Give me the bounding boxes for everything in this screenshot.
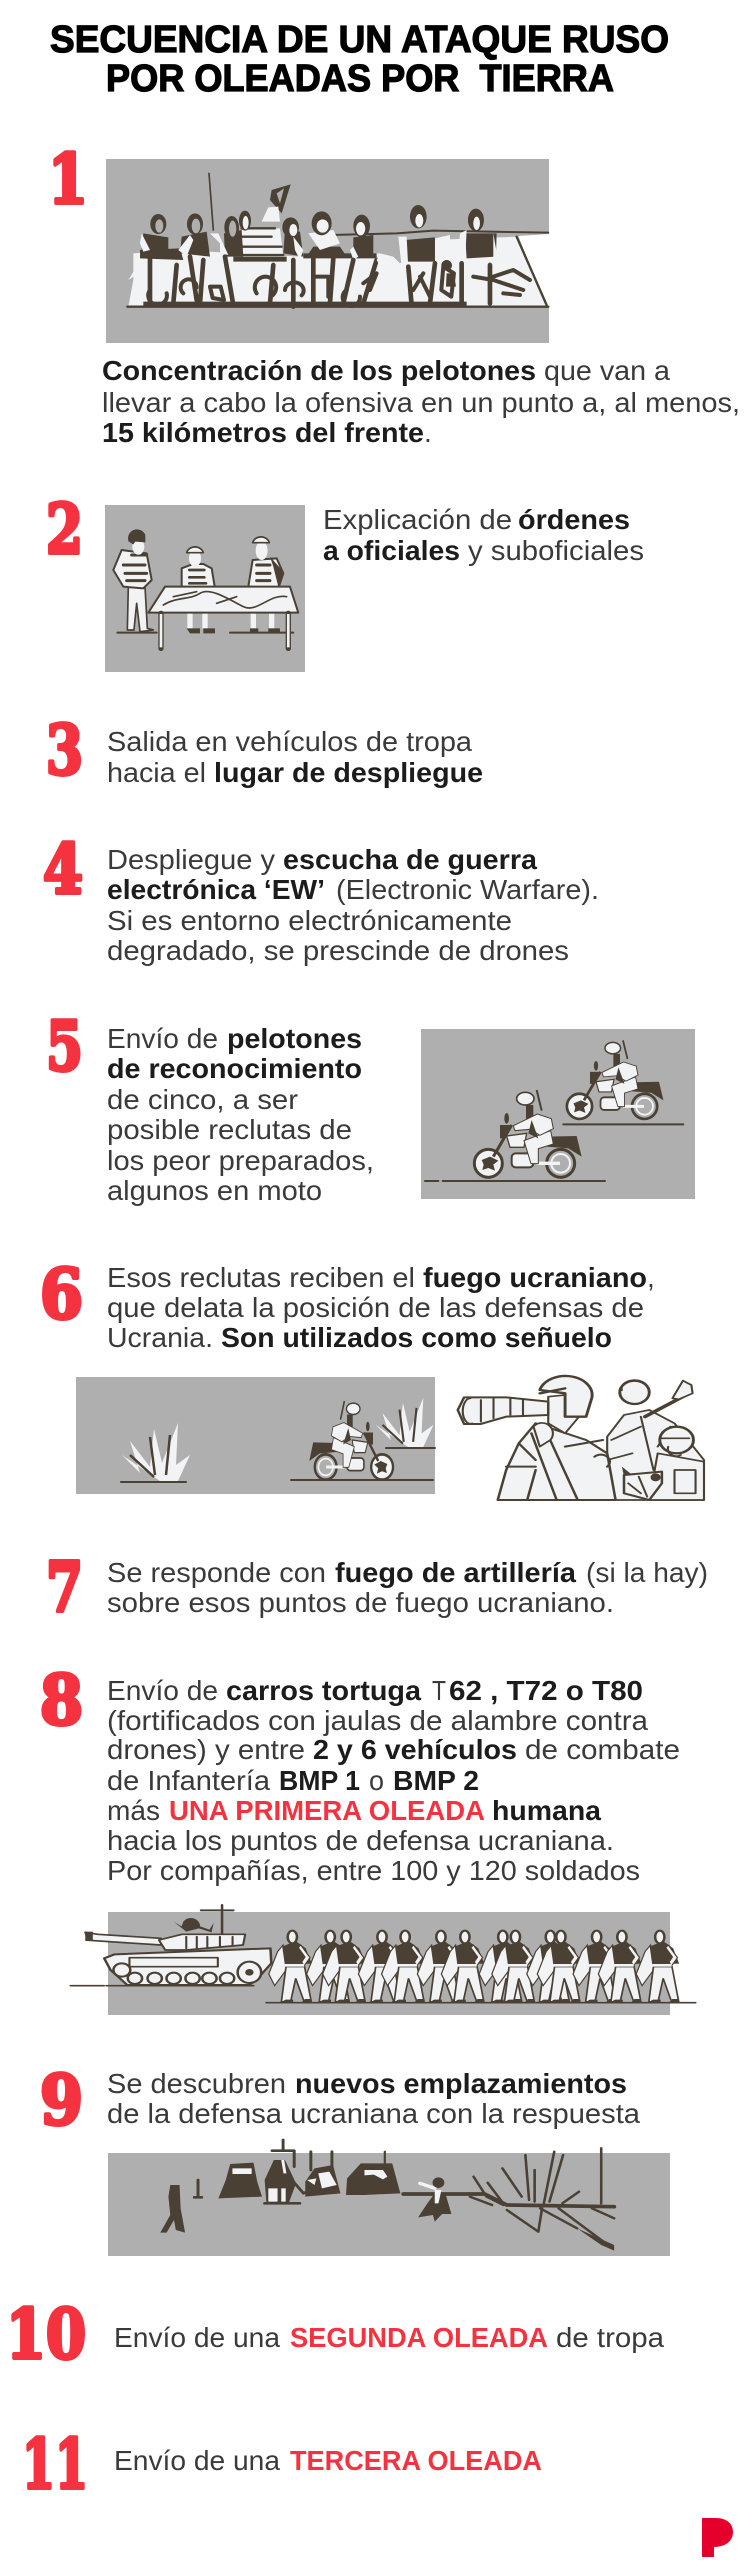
illustration: vehicles and troops among explosions [108, 2140, 670, 2256]
description: escucha de guerra [283, 844, 537, 875]
title [50, 19, 669, 100]
illustration: troops gathered around a tank [106, 159, 549, 343]
description: , [647, 1262, 655, 1293]
description: Ucrania. [107, 1322, 213, 1353]
number 10: 10 [6, 2295, 86, 2375]
description: fuego de artillería [335, 1557, 576, 1588]
description: (Electronic Warfare). [336, 874, 599, 905]
description [107, 1262, 655, 1353]
description: hacia los puntos de defensa ucraniana. [107, 1825, 614, 1856]
description: BMP 1 [279, 1765, 360, 1796]
description: Esos reclutas reciben el [107, 1262, 415, 1293]
description: Se descubren [107, 2068, 286, 2099]
number 4: 4 [43, 830, 83, 910]
description: Son utilizados como señuelo [221, 1322, 612, 1353]
title: POR OLEADAS POR TIERRA [106, 58, 614, 100]
description: fuego ucraniano [423, 1262, 647, 1293]
description: que delata la posición de las defensas de [107, 1292, 644, 1323]
description: Se responde con [107, 1557, 326, 1588]
description: Explicación de [323, 504, 512, 535]
description [323, 504, 644, 566]
number 11: 11 [22, 2425, 88, 2505]
description: (fortificados con jaulas de alambre contra [107, 1705, 648, 1736]
description: de la defensa ucraniana con la respuesta [107, 2098, 640, 2129]
description [107, 1023, 374, 1206]
step 7 [46, 1548, 708, 1628]
description: sobre esos puntos de fuego ucraniano. [107, 1587, 614, 1618]
description: llevar a cabo la ofensiva en un punto a, al menos, [102, 387, 740, 418]
description: (si la hay) [586, 1557, 708, 1588]
description: posible reclutas de [107, 1114, 352, 1145]
number 6: 6 [40, 1255, 83, 1335]
description: que van a [544, 355, 670, 386]
description: más [107, 1795, 160, 1826]
description: lugar de despliegue [214, 757, 483, 788]
illustration: recruit on motorcycle under fire [76, 1377, 435, 1494]
description: degradado, se prescinde de drones [107, 935, 569, 966]
step 11 [22, 2425, 542, 2505]
description: . [424, 417, 432, 448]
description: algunos en moto [107, 1175, 322, 1206]
description: TERCERA OLEADA [290, 2445, 542, 2476]
number 5: 5 [46, 1007, 83, 1087]
description: SEGUNDA OLEADA [290, 2322, 548, 2353]
step 2 [46, 490, 644, 672]
description: de tropa [556, 2322, 664, 2353]
description [107, 1675, 680, 1886]
number 2: 2 [46, 490, 83, 570]
description [107, 726, 483, 788]
description: Concentración de los pelotones [102, 355, 536, 386]
step 8 [40, 1661, 696, 2015]
description: o [369, 1765, 384, 1796]
number 7: 7 [46, 1548, 83, 1628]
description: pelotones [227, 1023, 362, 1054]
description [107, 844, 599, 966]
description [107, 2068, 640, 2129]
illustration: tank followed by a wave of infantry [71, 1905, 696, 2015]
description: UNA PRIMERA OLEADA [169, 1795, 485, 1826]
step 4 [43, 830, 599, 966]
description: drones) y entre [107, 1734, 305, 1765]
description: Envío de [107, 1023, 218, 1054]
number 8: 8 [40, 1661, 83, 1741]
step 5 [46, 1007, 695, 1206]
number 9: 9 [40, 2061, 83, 2141]
number 3: 3 [46, 711, 83, 791]
description: Envío de [107, 1675, 218, 1706]
description: Por compañías, entre 100 y 120 soldados [107, 1855, 640, 1886]
description: BMP 2 [393, 1765, 479, 1796]
step 3 [46, 711, 483, 791]
description: T [432, 1675, 446, 1706]
description: 15 kilómetros del frente [102, 417, 424, 448]
step 1 [48, 140, 740, 448]
description [114, 2445, 542, 2476]
description: órdenes [518, 504, 630, 535]
description: nuevos emplazamientos [295, 2068, 627, 2099]
title: SECUENCIA DE UN ATAQUE RUSO [50, 19, 669, 61]
description [107, 1557, 708, 1618]
description: Despliegue y [107, 844, 275, 875]
step 9 [40, 2061, 670, 2256]
description: y suboficiales [468, 535, 644, 566]
description: 62 , T72 o T80 [449, 1675, 643, 1706]
description: Si es entorno electrónicamente [107, 905, 512, 936]
description: Salida en vehículos de tropa [107, 726, 472, 757]
step 10 [6, 2295, 664, 2375]
description: hacia el [107, 757, 206, 788]
description: de combate [525, 1734, 680, 1765]
description: Envío de una [114, 2445, 280, 2476]
description: 2 y 6 vehículos [313, 1734, 517, 1765]
description: de reconocimiento [107, 1053, 362, 1084]
description: electrónica ‘EW’ [107, 874, 325, 905]
description: a oficiales [323, 535, 460, 566]
description: de cinco, a ser [107, 1084, 298, 1115]
illustration: officers around a map table [105, 505, 305, 672]
number 1: 1 [48, 140, 88, 220]
description: de Infantería [107, 1765, 270, 1796]
description [114, 2322, 664, 2353]
description: Envío de una [114, 2322, 280, 2353]
description: humana [492, 1795, 601, 1826]
illustration: two recruits on motorcycles [421, 1029, 695, 1199]
illustration: Ukrainian soldiers with optics [458, 1376, 704, 1500]
logo: P [702, 2518, 733, 2557]
step 6 [40, 1255, 704, 1500]
description: carros tortuga [226, 1675, 421, 1706]
description: los peor preparados, [107, 1145, 374, 1176]
description [102, 355, 740, 448]
